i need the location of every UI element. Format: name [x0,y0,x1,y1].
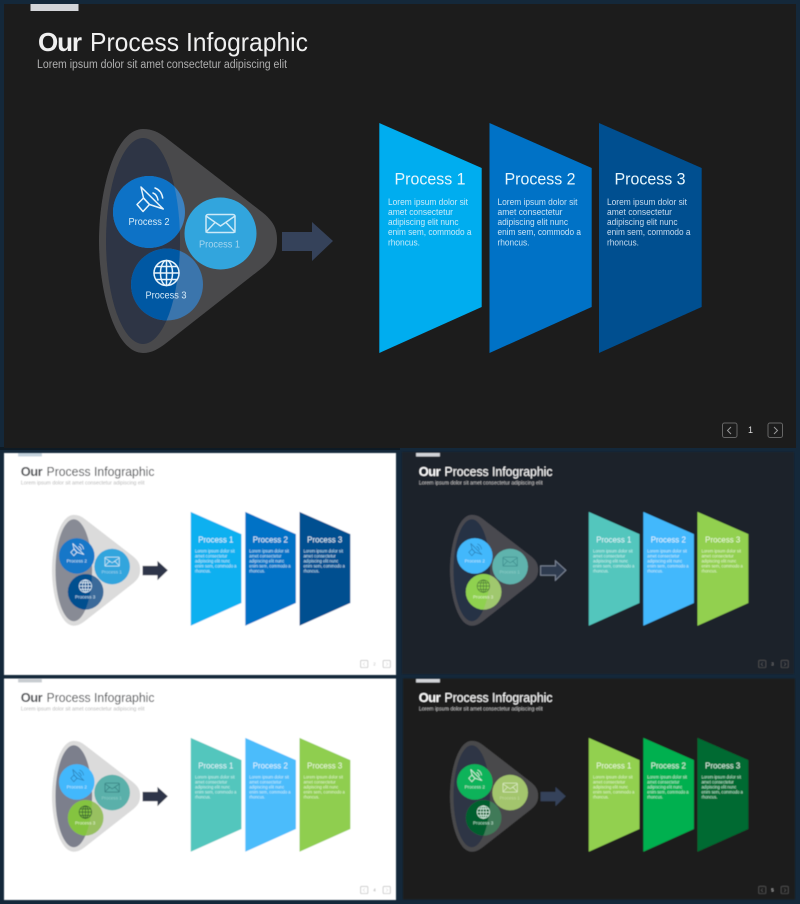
accent bar [416,679,440,682]
funnel [52,515,140,626]
circle: process 1: Process 1 [500,570,520,576]
card: process 2: adipiscing elit nunc [647,784,683,789]
card: process 3: Process 3 [705,534,741,544]
card: process 2: amet consectetur [647,553,680,558]
card: process 3: amet consectetur [303,779,336,784]
circle: process 2 [457,538,493,574]
card: process 1: Process 1 [394,170,466,188]
card: process 2: enim sem, commodo a [647,789,689,794]
card: process 3: enim sem, commodo a [303,789,345,794]
card: process 2: Process 2 [651,760,686,770]
card: process 3: Lorem ipsum dolor sit [701,548,742,553]
title: Our [419,464,441,479]
card: process 2 [643,738,694,852]
card: process 1: rhoncus. [593,795,609,800]
card: process 2 [643,512,694,626]
circle: process 3: Process 3 [473,595,494,601]
card: process 2: Lorem ipsum dolor sit [249,774,290,779]
card: process 2: amet consectetur [249,779,282,784]
card: process 2: amet consectetur [249,553,282,558]
card: process 3: Process 3 [614,170,686,188]
subtitle: Lorem ipsum dolor sit amet consectetur adipiscing elit [419,707,543,713]
accent bar [416,453,440,456]
card: process 1: rhoncus. [593,569,609,574]
card: process 1: enim sem, commodo a [593,563,635,568]
page navigation: 2 [373,661,376,666]
circle: process 3: Process 3 [473,821,494,827]
circle: process 1: Process 1 [500,796,520,802]
circle: process 2: Process 2 [465,558,485,564]
card: process 3: enim sem, commodo a [701,563,743,568]
card: process 2: Process 2 [504,170,576,188]
circle: process 1 [94,549,130,584]
panel: main dark slide [4,4,796,448]
card: process 3: rhoncus. [303,569,319,574]
card: process 1: enim sem, commodo a [195,789,237,794]
card: process 3: enim sem, commodo a [701,789,743,794]
card: process 1: Process 1 [596,534,632,544]
card: process 1: enim sem, commodo a [388,227,472,237]
subtitle: Lorem ipsum dolor sit amet consectetur adipiscing elit [419,481,543,487]
page navigation [722,423,782,438]
card: process 3: Lorem ipsum dolor sit [701,774,742,779]
card: process 3: Lorem ipsum dolor sit [303,548,344,553]
circle: process 1: Process 1 [102,570,122,576]
card: process 3: rhoncus. [701,569,717,574]
page navigation: 5 [771,887,774,892]
arrow [541,787,566,806]
card: process 2: amet consectetur [647,779,680,784]
card: process 3 [300,512,350,626]
circle: process 1: Process 1 [199,240,240,250]
page navigation [361,660,390,668]
subtitle: Lorem ipsum dolor sit amet consectetur adipiscing elit [21,481,145,487]
card: process 2: enim sem, commodo a [249,789,291,794]
card: process 2 [490,123,592,353]
card: process 3: Process 3 [307,760,343,770]
circle: process 1 [94,775,130,810]
page navigation: 4 [373,887,376,892]
card: process 1 [589,512,639,626]
card: process 3: adipiscing elit nunc [303,558,339,563]
accent bar [18,453,42,456]
card: process 3: enim sem, commodo a [303,563,345,568]
card: process 1 [379,123,482,353]
card: process 3: adipiscing elit nunc [303,784,339,789]
card: process 2 [245,738,296,852]
circle: process 1 [184,198,256,270]
card: process 2: adipiscing elit nunc [647,558,683,563]
card: process 1: rhoncus. [388,238,420,248]
funnel [99,129,277,353]
circle: process 2 [59,538,95,574]
arrow [143,561,168,580]
card: process 1: Process 1 [198,534,234,544]
card: process 3 [698,512,748,626]
card: process 3: Lorem ipsum dolor sit [607,197,687,207]
circle: process 1 [492,775,528,810]
panel: dark slide, green palette [403,678,795,900]
card: process 2: Lorem ipsum dolor sit [249,548,290,553]
card: process 1: Lorem ipsum dolor sit [388,197,468,207]
arrow [282,222,333,261]
card: process 2: rhoncus. [647,795,663,800]
circle: process 2: Process 2 [67,784,87,790]
card: process 1: Lorem ipsum dolor sit [195,774,235,779]
card: process 1: amet consectetur [195,779,228,784]
card: process 3: Process 3 [705,760,741,770]
circle: process 2 [113,176,185,248]
card: process 1 [191,512,241,626]
card: process 1: adipiscing elit nunc [388,217,459,227]
card: process 3: amet consectetur [701,779,734,784]
card: process 1: adipiscing elit nunc [593,784,629,789]
page navigation [759,886,788,894]
card: process 2: rhoncus. [647,569,663,574]
card: process 3: rhoncus. [701,795,717,800]
circle: process 3: Process 3 [75,821,96,827]
circle: process 1 [492,549,528,584]
panel: white slide, blue palette [4,453,396,675]
funnel [450,741,538,852]
title: Our [21,464,43,479]
card: process 2: adipiscing elit nunc [249,784,285,789]
subtitle: Lorem ipsum dolor sit amet consectetur adipiscing elit [37,59,288,71]
panel: white slide, teal palette [4,678,396,900]
card: process 2: adipiscing elit nunc [498,217,568,227]
circle: process 3 [68,800,103,836]
card: process 3: amet consectetur [607,207,672,217]
card: process 1: adipiscing elit nunc [593,558,629,563]
card: process 1: Lorem ipsum dolor sit [593,548,633,553]
card: process 1: enim sem, commodo a [593,789,635,794]
card: process 2: enim sem, commodo a [647,563,689,568]
card: process 1: amet consectetur [593,779,626,784]
circle: process 3 [466,800,501,836]
card: process 2 [245,512,296,626]
title: Process Infographic [445,464,553,479]
card: process 2: adipiscing elit nunc [249,558,285,563]
card: process 3: Process 3 [307,534,343,544]
title: Process Infographic [445,690,553,705]
card: process 1: amet consectetur [195,553,228,558]
circle: process 2: Process 2 [67,558,87,564]
page navigation [361,886,390,894]
card: process 3: amet consectetur [701,553,734,558]
card: process 3 [300,738,350,852]
circle: process 1: Process 1 [102,796,122,802]
card: process 1: Process 1 [596,760,632,770]
title: Process Infographic [47,464,155,479]
circle: process 2 [457,764,493,800]
card: process 1: enim sem, commodo a [195,563,237,568]
card: process 3: amet consectetur [303,553,336,558]
card: process 3: Lorem ipsum dolor sit [303,774,344,779]
page navigation: 1 [748,425,753,435]
card: process 2: enim sem, commodo a [249,563,291,568]
circle: process 2: Process 2 [465,784,485,790]
title: Process Infographic [47,690,155,705]
funnel [52,741,140,852]
circle: process 3 [131,248,203,320]
card: process 1 [589,738,639,852]
title: Process Infographic [90,27,308,57]
subtitle: Lorem ipsum dolor sit amet consectetur adipiscing elit [21,707,145,713]
card: process 1: adipiscing elit nunc [195,784,231,789]
card: process 1: adipiscing elit nunc [195,558,231,563]
arrow [541,561,566,580]
accent bar [30,4,78,11]
card: process 3: adipiscing elit nunc [701,784,737,789]
card: process 1: rhoncus. [195,795,211,800]
title: Our [419,690,441,705]
card: process 1: rhoncus. [195,569,211,574]
card: process 1: Process 1 [198,760,234,770]
circle: process 2: Process 2 [128,217,170,228]
card: process 2: rhoncus. [249,569,265,574]
card: process 2: rhoncus. [498,238,530,248]
card: process 2: Process 2 [651,534,686,544]
page navigation: 3 [771,661,774,666]
card: process 2: rhoncus. [249,795,265,800]
card: process 2: enim sem, commodo a [498,227,581,237]
card: process 1: Lorem ipsum dolor sit [593,774,633,779]
card: process 3: enim sem, commodo a [607,227,690,237]
circle: process 2 [59,764,95,800]
card: process 3: adipiscing elit nunc [701,558,737,563]
card: process 1: Lorem ipsum dolor sit [195,548,235,553]
card: process 1 [191,738,241,852]
circle: process 3 [466,574,501,610]
accent bar [18,679,42,682]
card: process 3 [698,738,748,852]
card: process 2: Lorem ipsum dolor sit [647,548,688,553]
page navigation [759,660,788,668]
circle: process 3 [68,574,103,610]
card: process 3: rhoncus. [303,795,319,800]
title: Our [21,690,43,705]
card: process 2: Lorem ipsum dolor sit [498,197,578,207]
card: process 2: Process 2 [253,534,288,544]
card: process 3: rhoncus. [607,238,639,248]
card: process 2: Lorem ipsum dolor sit [647,774,688,779]
card: process 1: amet consectetur [388,207,453,217]
funnel [450,515,538,626]
circle: process 3: Process 3 [75,595,96,601]
card: process 3 [599,123,702,353]
card: process 3: adipiscing elit nunc [607,217,678,227]
card: process 2: amet consectetur [498,207,562,217]
arrow [143,787,168,806]
title: Our [38,27,82,57]
card: process 2: Process 2 [253,760,288,770]
circle: process 3: Process 3 [146,290,187,302]
card: process 1: amet consectetur [593,553,626,558]
panel: navy slide, teal palette [402,452,794,674]
